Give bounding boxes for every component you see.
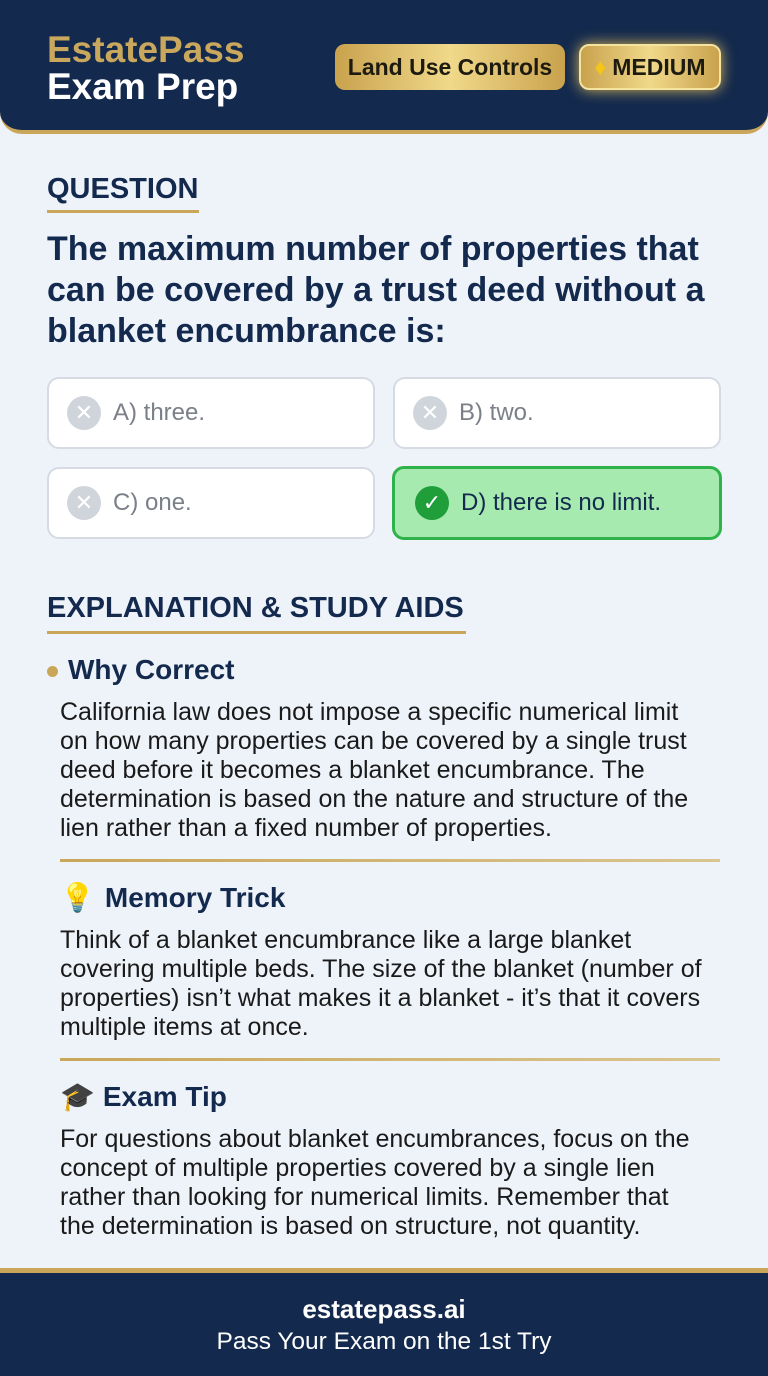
exam tip: rather than looking for numerical limits. Remember that — [60, 1183, 669, 1211]
header — [0, 0, 768, 134]
exam tip: 🎓 Exam Tip — [60, 1081, 227, 1112]
why correct: California law does not impose a specific numerical limit on how many properties can be covered by a single trust deed before it becomes a blanket encumbrance. The determination is based on the nature and structure of the lien rather than a fixed number of properties. — [60, 698, 688, 842]
option A: A) three. — [113, 399, 205, 426]
memory trick: Think of a blanket encumbrance like a large blanket covering multiple beds. The size of the blanket (number of properties) isn’t what makes it a blanket - it’s that it covers multiple items at once. — [60, 926, 702, 1041]
option D correct — [392, 466, 722, 540]
exam tip: the determination is based on structure, not quantity. — [60, 1212, 640, 1240]
option B: ✕ — [421, 400, 439, 425]
question text: The maximum number of properties that can be covered by a trust deed without a blanket encumbrance is: — [47, 230, 704, 350]
option B — [393, 377, 721, 449]
exam tip: concept of multiple properties covered by a single lien — [60, 1154, 655, 1182]
exam tip — [60, 1081, 690, 1240]
logo: EstatePass — [47, 29, 244, 70]
question label: QUESTION — [47, 173, 198, 205]
footer tagline: Pass Your Exam on the 1st Try — [216, 1328, 552, 1355]
option C: ✕ — [75, 490, 93, 515]
footer — [0, 1268, 768, 1376]
option C: C) one. — [113, 489, 192, 516]
memory trick: 💡 Memory Trick — [60, 882, 285, 913]
footer site: estatepass.ai — [302, 1294, 466, 1324]
logo: Exam Prep — [47, 66, 238, 107]
why correct: Why Correct — [68, 654, 234, 685]
exam tip: For questions about blanket encumbrances, focus on the — [60, 1125, 690, 1153]
topic pill: Land Use Controls — [348, 54, 552, 80]
difficulty pill: ♦ — [594, 54, 606, 80]
explanation heading: EXPLANATION & STUDY AIDS — [47, 592, 464, 624]
difficulty pill: MEDIUM — [612, 54, 706, 80]
option A: ✕ — [75, 400, 93, 425]
option D correct: ✓ — [423, 490, 441, 515]
difficulty pill — [579, 44, 721, 90]
option D correct: D) there is no limit. — [461, 489, 661, 516]
logo — [47, 29, 244, 107]
option C — [47, 467, 375, 539]
option B: B) two. — [459, 399, 534, 426]
option A — [47, 377, 375, 449]
topic pill — [335, 44, 565, 90]
